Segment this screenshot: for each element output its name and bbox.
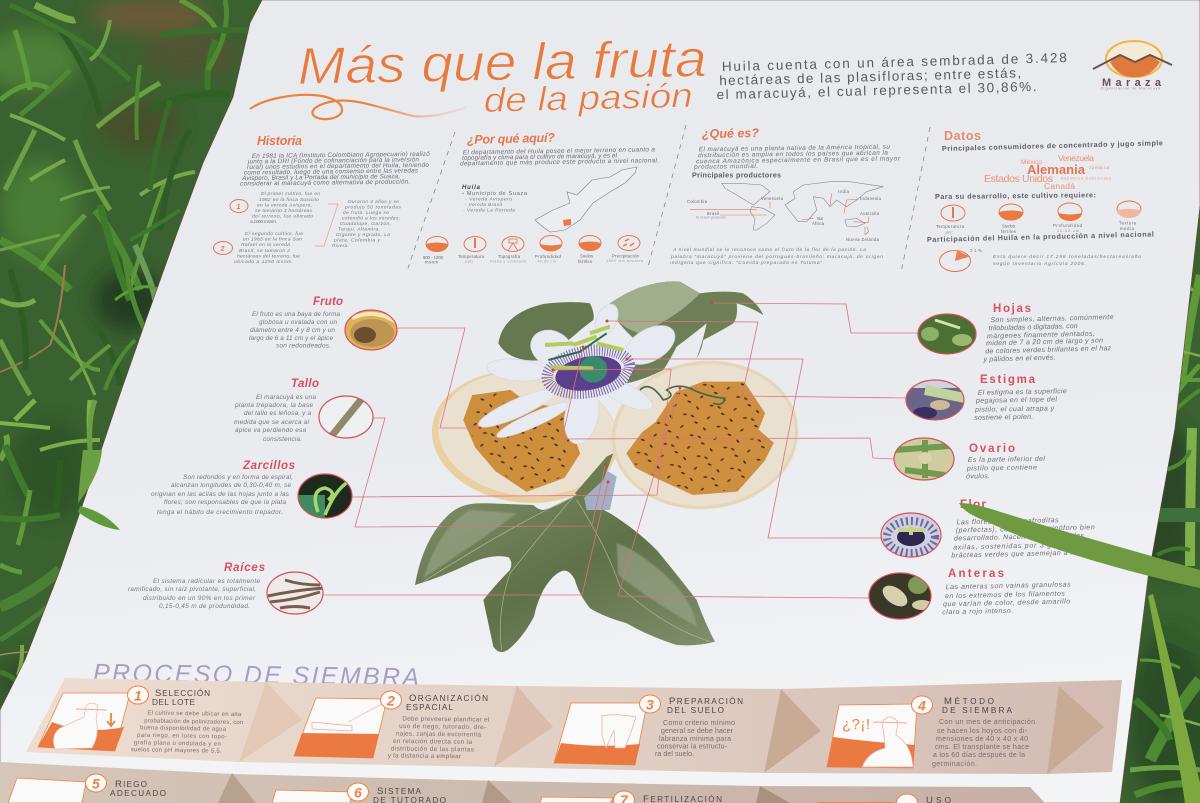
text block: first and second crops: Brasil, se tomaron 2 <box>239 248 290 254</box>
part: Hojas: Hojas <box>993 303 1031 315</box>
text block: 17.258 tonnes: Esto quiere decir 17.258 toneladas/hectareas/año <box>993 254 1141 260</box>
step 4: M ÉTODO <box>944 696 994 707</box>
text block: Historia intro: como resultado, luego de una consenso entre las veredas <box>244 167 419 177</box>
part: Hojas: trilobuladas o digitadas, con <box>989 323 1078 332</box>
step 2: ORGANIZACIÓN <box>409 693 488 704</box>
part: Hojas: márgenes finamente dentados, <box>987 331 1095 340</box>
part: Raíces <box>128 562 325 616</box>
step 2: Debe preveerse planificar el <box>402 716 489 724</box>
icon labels: fértiles <box>578 259 592 264</box>
step 1 <box>38 686 243 755</box>
step 4: Con un mes de anticipación <box>939 719 1035 726</box>
part: Ovario: óvulos. <box>966 473 990 480</box>
heading: Qué es: ¿Qué es? <box>702 126 759 141</box>
part: Fruto: globosa u ovalada con un <box>259 319 337 326</box>
text block: yields: Guadalupe, Garzón, <box>340 221 391 227</box>
part: Estigma: sostiene el polen. <box>974 414 1033 422</box>
text block: Por qué aquí: topografía y clima para el cultivo de maracuyá, y es el <box>462 152 618 162</box>
text block: yields: Rivera. <box>332 243 349 249</box>
text block: first and second crops: ubicado a 1250 msnm. <box>234 259 293 265</box>
stem wrap <box>583 467 617 510</box>
text block: yields: Gigante y Agrado, La <box>336 232 390 238</box>
intro text <box>716 50 1068 102</box>
part: Flor: Las flores son hermafroditas <box>957 517 1059 526</box>
part: Tallo: del tallo es leñosa, y a <box>244 410 311 417</box>
word cloud: consumer countries: Canadá <box>1044 181 1075 191</box>
process band: row 2 <box>0 762 1045 803</box>
step 2: 2 <box>386 692 395 708</box>
logo: Maraza: Maraza <box>1102 77 1162 89</box>
leaf: bottom <box>415 493 715 652</box>
step 2: distribución de las plantas <box>391 745 474 753</box>
part: Raíces: ramificado, sin raíz pivotante, superficial, <box>128 586 256 593</box>
panel: Por qué aquí <box>423 131 659 264</box>
intro text: Huila cuenta con un área sembrada de 3.428 <box>722 50 1067 74</box>
part: Hojas: y pálidos en el envés. <box>982 355 1056 364</box>
text block: first and second crops: El segundo cultivo, fue <box>245 231 303 237</box>
leaf veins <box>423 497 710 650</box>
text block: Qué es <box>693 143 901 171</box>
word cloud: consumer countries: México <box>1021 159 1042 166</box>
step 7 <box>540 791 722 803</box>
part: Zarcillos <box>151 460 355 520</box>
word cloud: consumer countries: Estados Unidos <box>984 173 1053 185</box>
text block: Qué es: cuenca Amazónica especialmente en Brasil que es el mayor <box>696 155 901 165</box>
text block: 17.258 tonnes <box>993 254 1141 267</box>
text block: first and second crops: El primer cultivo, fue en <box>261 191 320 197</box>
part: Anteras <box>868 568 1072 620</box>
title: Más que la fruta <box>297 30 707 96</box>
step 6: 6 <box>354 784 362 800</box>
text block: 17.258 tonnes: según Inventario Agrícola 2006. <box>993 261 1086 267</box>
part: Anteras: claro a rojo intenso. <box>942 608 1013 616</box>
icon labels: 25ºC <box>945 231 953 235</box>
icon labels: fértiles <box>1001 229 1016 234</box>
text block: Huila list: - Vereda La Portada <box>463 208 515 214</box>
world map with producers: África <box>812 221 825 226</box>
icon labels <box>936 220 1137 235</box>
step 1: probablación de polinizadores, con <box>144 718 243 726</box>
text block: Por qué aquí: departamento que más produce este producto a nivel nacional. <box>460 157 659 167</box>
map: Huila department <box>535 167 637 232</box>
world map with producers: El mayor productor <box>696 216 727 220</box>
part: Zarcillos: tenga el hábito de crecimiento trepador. <box>157 509 283 516</box>
text block: Huila list: • Municipio de Suaza <box>462 191 528 197</box>
icon labels: Topografía <box>498 254 521 259</box>
part: Flor: Flor <box>960 499 987 511</box>
decorative title swash <box>250 95 467 119</box>
part: Tallo <box>234 378 375 443</box>
step 4: se hacen los hoyos con di- <box>937 728 1028 735</box>
pie chart: 21%: 21% <box>970 248 982 253</box>
text block: Huila list <box>462 185 528 214</box>
text block: yields <box>332 199 402 249</box>
text block: Qué es: distribucción es amplia en todos los países que abrican la <box>698 150 888 159</box>
numbered badges <box>214 200 248 254</box>
part: Raíces: distribuido en un 90% en los primer <box>143 595 256 602</box>
step 5: RIEGO <box>115 779 147 790</box>
step 6: SISTEMA <box>377 786 422 797</box>
stem <box>575 453 613 500</box>
leaf: lit patches <box>423 510 697 627</box>
fruit: left half <box>425 361 625 512</box>
process band: row 1 <box>26 678 1122 774</box>
icon labels: Precipitación <box>612 254 640 258</box>
tendril <box>640 386 725 404</box>
text block: yields: Duraron 4 años y se <box>348 199 399 205</box>
part: Estigma: pegajosa en el tope del <box>975 396 1057 405</box>
icon labels: Temperatura <box>936 224 965 229</box>
panel: Datos <box>927 129 1163 272</box>
word cloud: consumer countries <box>984 153 1111 191</box>
text block: Historia intro <box>240 151 431 188</box>
part: Fruto: El fruto es una baya de forma <box>252 311 340 318</box>
icon labels: Plana y ondulada <box>490 260 527 264</box>
world map with producers <box>687 182 883 242</box>
heading: Historia: Historia <box>257 134 302 148</box>
icon row: conditions <box>426 236 640 252</box>
text block: Historia intro: Avispero, Brasil y La Portada del municipio de Suaza, <box>241 173 400 182</box>
text block: yields: de fruta. Luego se <box>343 210 389 216</box>
text block: Qué es: productos mundial. <box>693 163 758 171</box>
step 4 <box>827 696 1035 768</box>
step 6 <box>272 783 446 803</box>
part: Ovario: Es la parte inferior del <box>968 456 1045 464</box>
part: Ovario <box>892 436 1046 482</box>
part: Estigma: pistilo; el cual atrapa y <box>974 405 1055 414</box>
text block: Por qué aquí <box>460 146 659 167</box>
intro text: hectáreas de las plasifloras; entre estás, <box>719 65 1021 88</box>
part: Anteras: Las anteras son vainas granulosas <box>946 581 1071 591</box>
world map with producers: Sur <box>817 216 824 221</box>
part: Zarcillos: alcanzan longitudes de 0,30-0,40 m, se <box>171 482 291 489</box>
part: Hojas: Son simples, alternas, comúnmente <box>990 314 1114 324</box>
part: Zarcillos: originan en las acilas de las hojas junto a las <box>151 491 290 498</box>
leaf: top left <box>498 302 594 360</box>
icon labels: media <box>1120 226 1135 231</box>
step 2: najes, zanjas de escorrentía <box>396 730 482 739</box>
text block: Historia intro: En 1981 la ICA (Instituto Colombiano Agropecuario) realizó <box>252 151 430 160</box>
world map with producers: Brasil <box>707 211 719 216</box>
leader lines <box>323 302 918 598</box>
word cloud: consumer countries: República Dominicana <box>1061 176 1111 180</box>
part: Raíces: Raíces <box>224 562 265 574</box>
part: Zarcillos: Son redondos y en forma de espiral, <box>183 474 293 481</box>
part: Ovario: pistilo que contiene <box>966 464 1037 472</box>
step 2: y la distancia a emplear. <box>388 752 463 760</box>
part: Zarcillos: flores; son responsables de que la plata <box>164 499 286 506</box>
step 1: para riego, en lotes con topo- <box>137 733 227 740</box>
text block: first and second crops: hectáreas del terreno, fue <box>237 254 300 260</box>
heading: Por qué aquí: ¿Por qué aquí? <box>467 131 555 147</box>
pie chart: 21% <box>940 248 982 272</box>
text block: Historia intro: rural) unos estudios en el departamento del Huila, teniendo <box>247 162 429 171</box>
step 1: buena disponibilidad de agua <box>140 725 227 733</box>
part: Estigma <box>904 374 1067 422</box>
step 5: 5 <box>92 776 100 792</box>
part: Anteras: que varían de color, desde amarillo <box>943 598 1070 608</box>
panel: Qué es <box>670 126 901 266</box>
heading: Proceso de siembra: PROCESO DE SIEMBRA <box>93 659 419 692</box>
part: Tallo: Tallo <box>291 378 319 390</box>
part: Fruto: diámetro entre 4 y 8 cm y un <box>250 327 335 334</box>
step 3: general se debe hacer <box>661 728 734 735</box>
part: Ovario: Ovario <box>969 443 1015 455</box>
step 4: a los 60 días después de la <box>933 752 1025 759</box>
foreground grass blades <box>78 400 1200 803</box>
part: Fruto: son redondeados. <box>276 342 331 350</box>
icon labels: Suelos <box>580 254 593 258</box>
numbered badges: 2 <box>220 246 224 253</box>
part: Tallo: medida que se acerca al <box>234 419 310 426</box>
icon labels: Profundidad <box>535 254 562 259</box>
step 1: grafía plana u ondulada y en <box>134 740 221 748</box>
icon labels: 900 - 1200 <box>423 255 444 260</box>
world map with producers: Venezuela <box>761 196 784 201</box>
text block: Huila list: - Vereda Brasil <box>465 202 503 208</box>
flower <box>475 301 682 447</box>
text block: first and second crops: del terreno, fue ubicado <box>252 214 313 220</box>
text block: first and second crops: 1982 en la finca Susicito <box>259 197 319 203</box>
world map with producers: Nueva Zelanda <box>846 237 880 242</box>
part: Flor: brácteas verdes que asemejan a hojas <box>951 549 1090 560</box>
text block: Qué es: El maracuyá es una planta nativa de la América tropical, su <box>699 144 890 153</box>
world map with producers: Indonesia <box>860 196 882 201</box>
part: Raíces: El sistema radicular es totalmente <box>153 578 260 585</box>
numbered badges: 1 <box>236 204 240 211</box>
step 1: SELECCIÓN <box>155 688 210 699</box>
step 3: 3 <box>646 696 654 712</box>
icon labels: Suelos <box>1002 224 1015 228</box>
word cloud: consumer countries: Alemania <box>1027 162 1086 177</box>
step 5 <box>8 774 166 803</box>
icon labels: msnm <box>425 260 438 264</box>
part: Tallo: ápice va perdiendo esa <box>235 427 306 434</box>
step 1: 1 <box>134 688 142 704</box>
text block: first and second crops: en la vereda Avispero, <box>257 202 312 208</box>
text block: yields: plata, Colombia y <box>333 238 381 244</box>
step 3: ra del suelo. <box>655 751 694 758</box>
text block: yields: extendió a los veredas: <box>342 216 401 222</box>
text block: Historia intro: considerar al maracuyá como alternativa de producción. <box>240 179 410 188</box>
step 4: DE SIEMBRA <box>942 706 1013 715</box>
text block: name origin: A nivel mundial se le reconoce como el fruto de la flor de la pasión. La <box>672 247 866 253</box>
part: Hojas <box>915 303 1115 364</box>
step 3 <box>554 695 743 765</box>
step 4: mensiones de 40 x 40 x 40 <box>936 736 1028 743</box>
step 1: suelos con pH mayores de 5,5. <box>131 747 222 755</box>
step 4: ¿?¡! <box>842 716 870 733</box>
step 5: ADECUADO <box>110 789 166 798</box>
step 3: labranza mínima para <box>659 736 731 743</box>
text block: Huila list: Huila <box>462 185 481 191</box>
text block: first and second crops <box>234 191 320 265</box>
text block: first and second crops: Rafael en la vereda <box>241 242 290 248</box>
part: Fruto: Fruto <box>313 296 343 308</box>
arrows row 2 <box>218 773 790 803</box>
world map with producers: Australia <box>860 211 880 216</box>
text block: name origin <box>670 247 883 266</box>
logo: Maraza: Organización de Maracuyá <box>1100 86 1160 90</box>
part: Estigma: Estigma <box>980 374 1036 386</box>
step 4: germinación. <box>932 761 977 768</box>
part: Flor <box>880 499 1095 560</box>
icon labels: Temperatura <box>458 254 485 259</box>
part: Zarcillos: Zarcillos <box>242 460 295 472</box>
text block: Por qué aquí: El departamento del Huila posee el mejor terreno en cuanto a <box>463 146 655 156</box>
part: Fruto: largo de 6 a 11 cm y el ápice <box>249 335 333 342</box>
part: Hojas: miden de 7 a 20 cm de largo y son <box>986 337 1103 347</box>
text block: yields: Tarqui, Altamira, <box>338 226 380 232</box>
icon labels: 40-50 cm <box>1057 229 1079 233</box>
part: Hojas: de colores verdes brillantes en el haz <box>985 345 1112 355</box>
step 2: ESPACIAL <box>406 703 453 712</box>
title <box>297 30 707 120</box>
panel: Historia <box>214 134 431 265</box>
part: Raíces: 0,15-0,45 m de produndidad. <box>159 603 250 610</box>
text block: Huila list: - Vereda Avispero <box>465 196 512 202</box>
part: Flor: (perfectas), con un androginóforo bien <box>956 524 1095 534</box>
subheading: requirements: Para su desarrollo, este cultivo requiere: <box>935 190 1096 201</box>
word cloud: consumer countries: Jamaica <box>1089 165 1109 170</box>
icon labels: Profundidad <box>1053 223 1083 228</box>
subheading: participation: Participación del Huila en la producción a nivel nacional <box>927 229 1154 244</box>
text block: name origin: palabra "maracuyá" proviene del portugués-brasileño: maracujá, de origen <box>670 254 883 260</box>
leaf: top right <box>610 281 763 383</box>
bracket <box>315 204 338 246</box>
step 3: conservar la estructu- <box>657 744 728 750</box>
fruit: right half <box>604 352 806 518</box>
step 3: PREPARACIÓN <box>669 696 743 707</box>
step 1: El cultivo se debe ubicar en alta <box>147 710 242 718</box>
subheading: Principales productores: Principales productores <box>692 170 781 180</box>
text block: name origin: indígena que significa: "Comida preparada en Totuma". <box>670 260 824 266</box>
step 2: en relación directa con la <box>393 738 473 746</box>
text block: first and second crops: se tomaron 3 hectáreas <box>255 208 313 214</box>
text block: first and second crops: a 1000 msnm. <box>250 219 277 225</box>
step 2: uso de riego, tutorado, dre- <box>399 723 486 731</box>
world map with producers: India <box>838 189 850 194</box>
step 3: DEL SUELO <box>667 706 724 715</box>
part: Anteras: en los extremos de los filamentos <box>945 591 1065 600</box>
icon labels: Textura <box>1119 220 1137 226</box>
intro text: el maracuyá, el cual representa el 30,86%. <box>716 79 1037 102</box>
step 1: DEL LOTE <box>152 698 196 707</box>
heading: Datos: Datos <box>944 129 981 143</box>
icon labels: 1500 mm anuales <box>606 259 643 263</box>
part: Estigma: El estigma es la superficie <box>978 388 1067 397</box>
icon row: requirements <box>941 201 1141 221</box>
step 4: 4 <box>917 698 926 714</box>
text block: Historia intro: junto a la DRI (Fondo de cofinanciación para la inversión <box>247 156 419 166</box>
title: de la pasión <box>483 77 693 120</box>
step 3: Como criterio mínimo <box>663 720 735 727</box>
part: Tallo: El maracuyá es una <box>256 394 316 401</box>
arrows row 1 <box>239 682 1104 774</box>
icon labels: 24ºC <box>465 260 473 264</box>
part: Tallo: planta trepadora, la base <box>234 402 313 409</box>
step 2 <box>294 691 489 761</box>
part: Flor: desarrollado. Nacen solitarias en las <box>954 533 1085 542</box>
icon labels: 40-50 cm <box>537 260 556 264</box>
word cloud: consumer countries: Venezuela <box>1058 153 1094 163</box>
subheading: consumers: Principales consumidores de concentrado y jugo simple <box>942 138 1163 153</box>
world map with producers: Colombia <box>687 199 708 204</box>
step 8 <box>817 794 951 803</box>
logo: Maraza <box>1093 41 1172 90</box>
part: Flor: axilas, sostenidas por 3 grandes <box>953 542 1078 552</box>
text block: first and second crops: en 1983 en la finca San <box>243 236 302 242</box>
icon labels <box>423 254 643 264</box>
part: Tallo: consistencia. <box>263 436 302 443</box>
text block: yields: produjo 50 toneladas <box>344 204 402 210</box>
part: Fruto <box>249 296 400 355</box>
step 4: cms. El transplante se hace <box>935 744 1029 751</box>
part: Anteras: Anteras <box>948 568 1004 580</box>
plant illustration <box>415 281 806 652</box>
